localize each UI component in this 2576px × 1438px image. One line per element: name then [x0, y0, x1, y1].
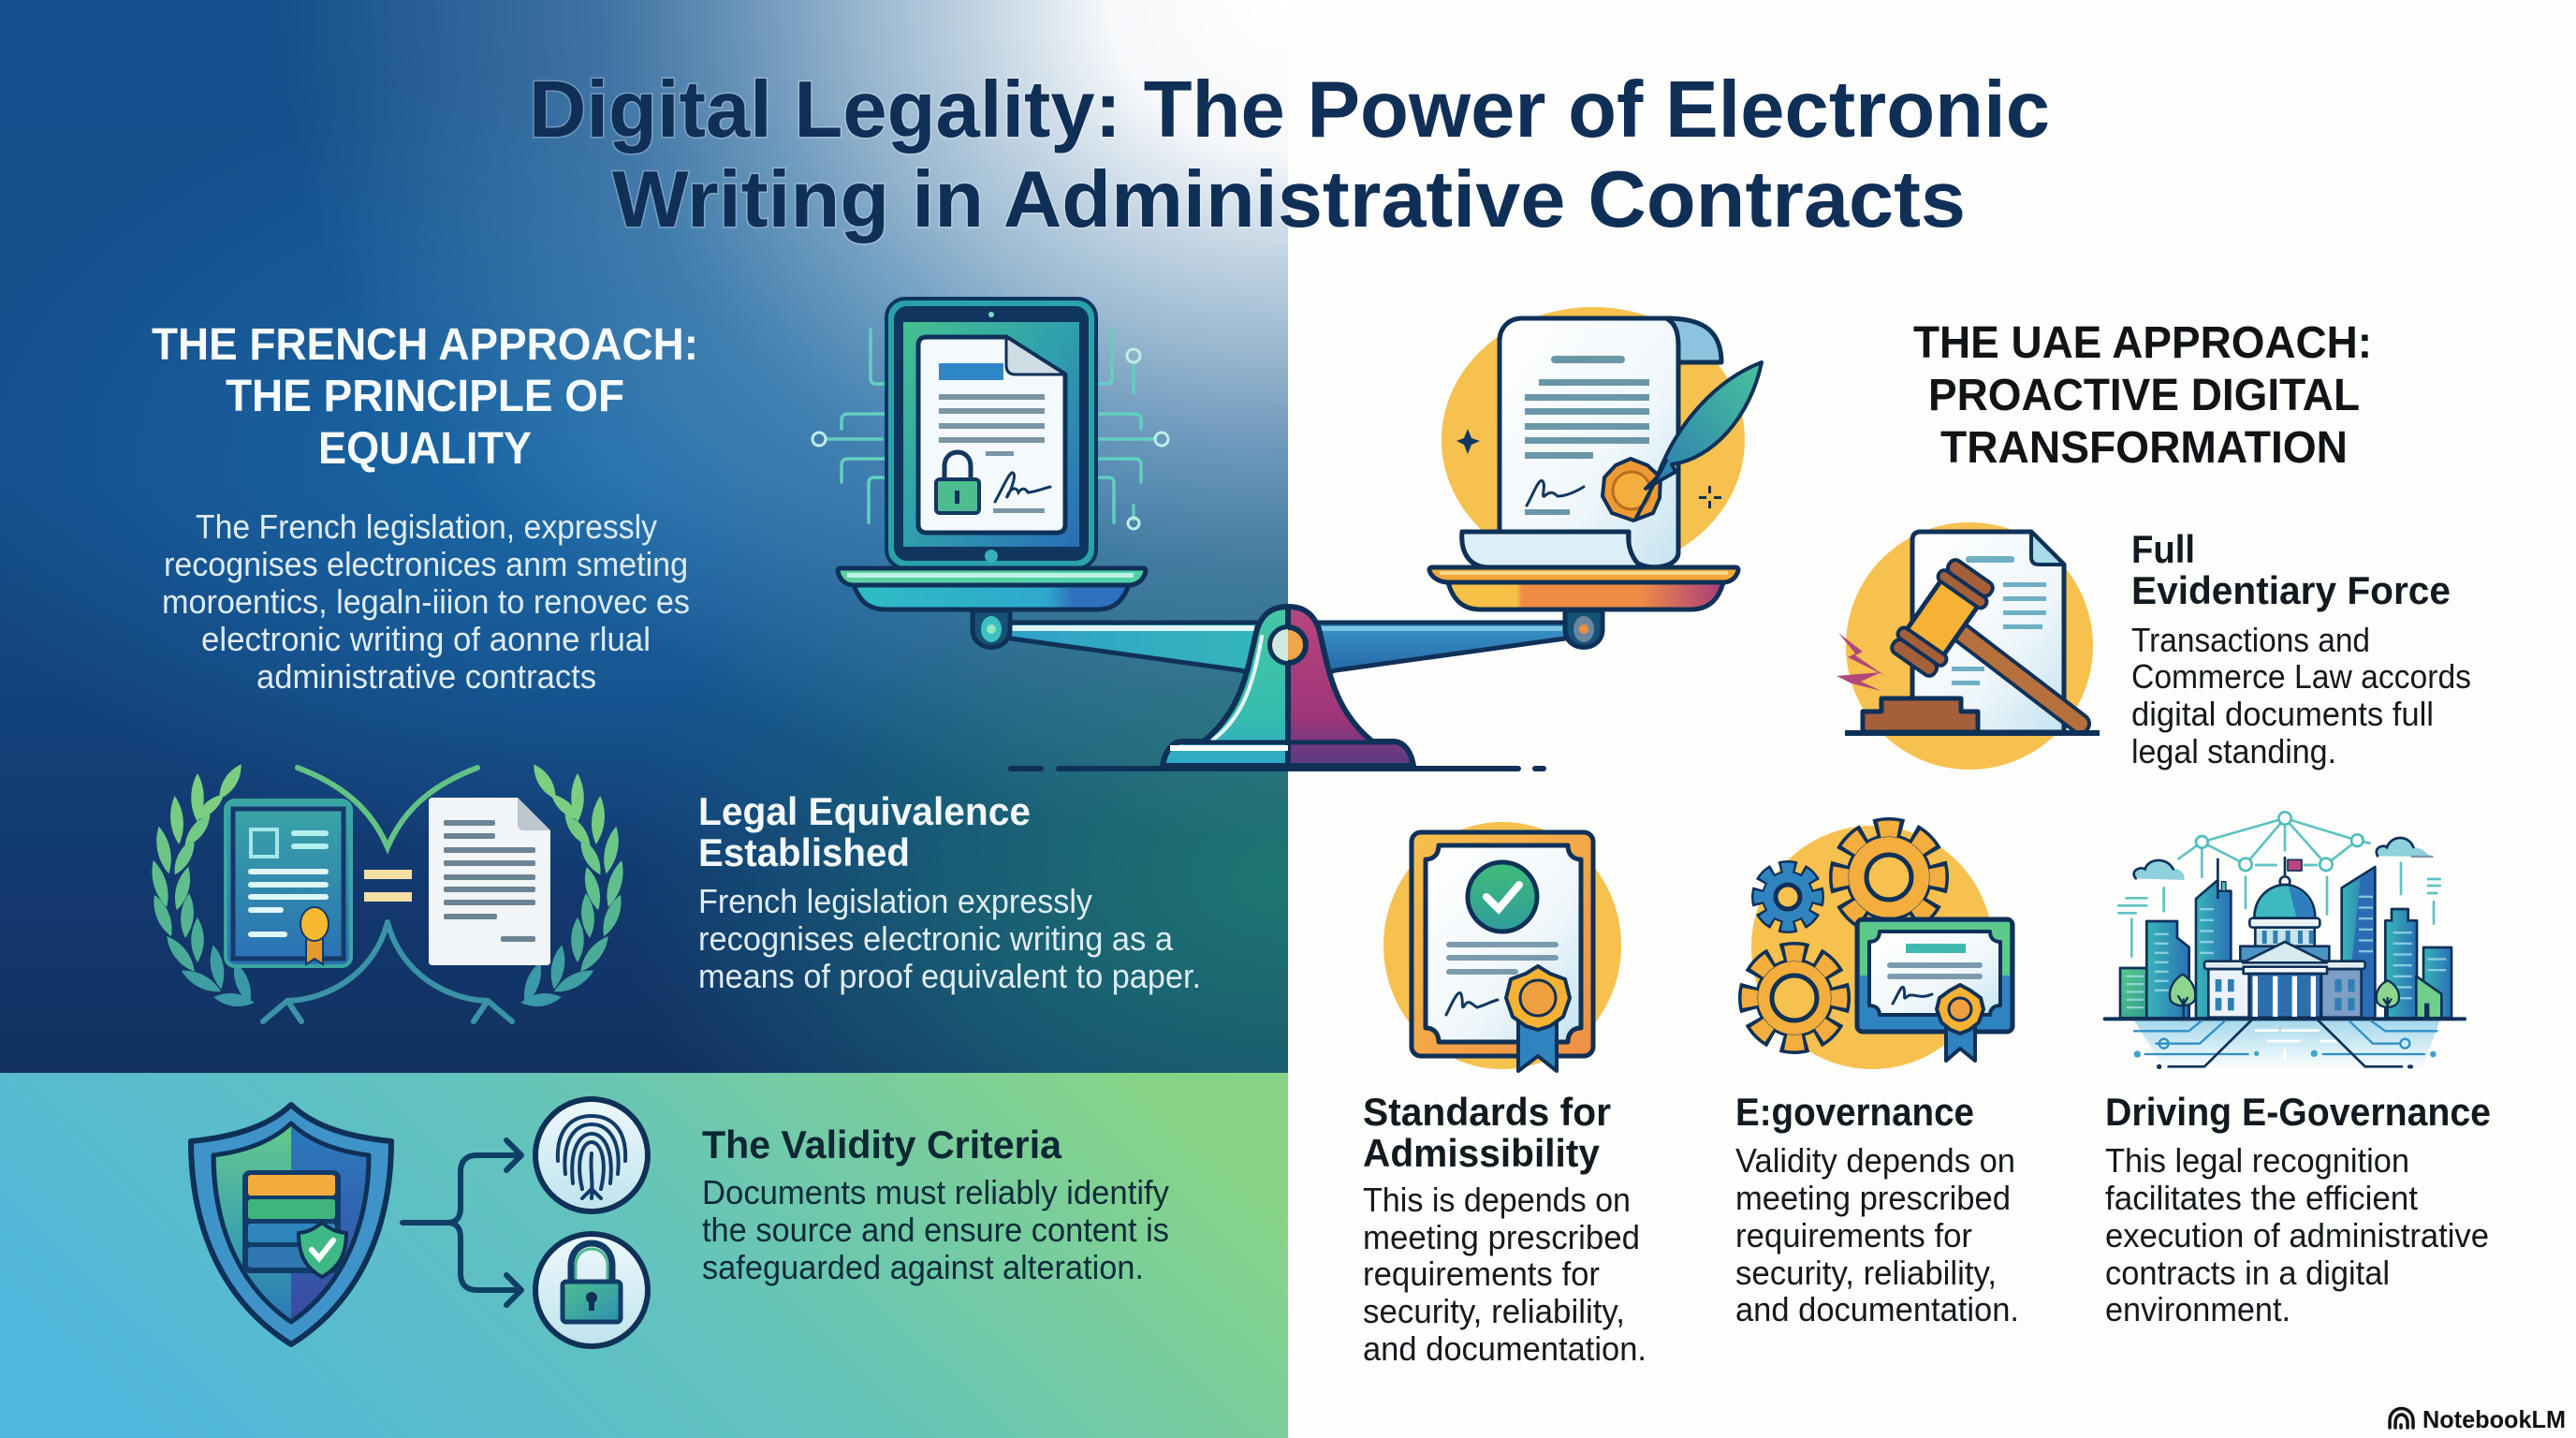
sound block	[1863, 698, 1978, 732]
left pan	[838, 568, 1146, 648]
paper document	[429, 798, 550, 965]
text block: full evidentiary force: legal standing.	[2131, 732, 2336, 770]
icon: gavel and document	[1837, 522, 2100, 770]
text block: standards for admissibility: This is depends on	[1363, 1181, 1631, 1219]
icon: legal equivalence with laurel wreath	[147, 761, 628, 1021]
clouds	[2133, 838, 2432, 880]
building windows	[2127, 896, 2446, 1008]
text block: driving e-governance: execution of administrative	[2105, 1216, 2489, 1255]
text block: legal equivalence: French legislation expressly	[698, 882, 1092, 920]
text block: full evidentiary force: Transactions and	[2131, 621, 2370, 659]
icon: smart government city	[2103, 812, 2466, 1070]
text block: full evidentiary force: digital documents full	[2131, 695, 2434, 733]
gear lower	[1749, 953, 1839, 1043]
text block: French legislation paragraph: The French legislation, expressly	[196, 507, 657, 546]
sparkles	[1456, 429, 1721, 508]
text block: French legislation paragraph: recognises electronices anm smeting	[164, 545, 688, 583]
text block: driving e-governance: Driving E-Governance	[2105, 1090, 2491, 1134]
gavel	[1887, 556, 2080, 724]
logo: NotebookLM: NotebookLM	[2422, 1405, 2566, 1433]
text block: standards for admissibility: Standards for	[1363, 1090, 1611, 1134]
heading: French approach: THE PRINCIPLE OF	[226, 372, 624, 421]
tablet document	[918, 337, 1065, 533]
title	[529, 66, 2050, 244]
network lines	[2118, 812, 2440, 957]
panel: French approach	[0, 0, 1288, 1073]
heading: French approach: EQUALITY	[318, 424, 532, 474]
icon: scroll with quill on right pan	[1429, 307, 1762, 648]
text block: legal equivalence: Legal Equivalence	[698, 789, 1031, 833]
text block: legal equivalence: means of proof equivalent to paper.	[698, 957, 1201, 995]
title: Writing in Administrative Contracts	[612, 155, 1966, 244]
heading: UAE approach: THE UAE APPROACH:	[1913, 318, 2372, 368]
tablet body	[886, 299, 1096, 568]
text block: e-governance: Validity depends on	[1735, 1141, 2015, 1180]
text block: validity criteria	[702, 1123, 1169, 1286]
buildings right	[2342, 867, 2452, 1018]
icon: padlock	[535, 1234, 648, 1346]
text block: driving e-governance	[2105, 1090, 2491, 1328]
text block: legal equivalence: Established	[698, 830, 910, 874]
text block: e-governance: requirements for	[1735, 1216, 1972, 1255]
text block: French legislation paragraph: moroentics, legaln-iiion to renovec es	[162, 582, 690, 621]
text block: legal equivalence	[698, 789, 1201, 995]
text block: legal equivalence: recognises electronic writing as a	[698, 919, 1174, 958]
heading: French approach: THE FRENCH APPROACH:	[152, 320, 698, 370]
text block: French legislation paragraph: administrative contracts	[256, 657, 596, 696]
text block: e-governance: security, reliability,	[1735, 1254, 1997, 1292]
text block: e-governance: meeting prescribed	[1735, 1179, 2011, 1217]
text block: validity criteria: the source and ensure content is	[702, 1211, 1169, 1249]
heading: UAE approach: TRANSFORMATION	[1940, 423, 2348, 473]
text block: validity criteria: Documents must reliably identify	[702, 1173, 1169, 1211]
text block: e-governance: and documentation.	[1735, 1290, 2019, 1328]
text block: French legislation paragraph	[162, 507, 690, 696]
road and circuit ground	[2103, 1017, 2466, 1070]
icon: gears and certificate	[1749, 826, 2012, 1069]
scale fulcrum	[1163, 607, 1413, 766]
icon: fingerprint	[535, 1099, 648, 1211]
text block: driving e-governance: environment.	[2105, 1290, 2291, 1328]
text block: full evidentiary force: Commerce Law accords	[2131, 657, 2471, 696]
capitol building	[2204, 857, 2365, 1018]
icon: certificate with check	[1383, 822, 1621, 1071]
scale ground line	[1008, 766, 1546, 771]
text block: validity criteria: safeguarded against alteration.	[702, 1248, 1144, 1286]
text block: full evidentiary force: Evidentiary Force	[2131, 568, 2451, 612]
panel: validity criteria	[0, 1073, 1288, 1438]
text block: full evidentiary force	[2131, 527, 2471, 770]
text block: standards for admissibility: security, reliability,	[1363, 1292, 1625, 1330]
buildings left	[2120, 858, 2231, 1018]
text block: standards for admissibility: requirements for	[1363, 1255, 1600, 1293]
scroll	[1462, 318, 1721, 567]
trees	[2170, 975, 2399, 1018]
scale beam	[992, 623, 1584, 683]
icon: tablet on left pan	[812, 299, 1168, 648]
text block: standards for admissibility: and documentation.	[1363, 1329, 1647, 1368]
title: Digital Legality: The Power of Electronic	[529, 66, 2050, 154]
text block: validity criteria: The Validity Criteria	[702, 1123, 1062, 1167]
gear top	[1840, 829, 1938, 926]
text block: driving e-governance: contracts in a digital	[2105, 1254, 2390, 1292]
heading: UAE approach	[1913, 318, 2372, 473]
gear small blue	[1759, 868, 1817, 926]
icon: shield with server stack	[191, 1105, 391, 1344]
icon: balance scale	[992, 607, 1584, 771]
heading: UAE approach: PROACTIVE DIGITAL	[1928, 371, 2360, 420]
electronic document	[226, 800, 351, 966]
text block: French legislation paragraph: electronic writing of aonne rlual	[201, 620, 651, 658]
text block: full evidentiary force: Full	[2131, 527, 2195, 571]
small certificate	[1857, 919, 2012, 1061]
text block: e-governance: E:governance	[1735, 1090, 1974, 1134]
equals sign	[364, 870, 412, 902]
heading: French approach	[152, 320, 698, 474]
text block: standards for admissibility: meeting prescribed	[1363, 1218, 1640, 1256]
text block: standards for admissibility: Admissibility	[1363, 1131, 1601, 1175]
text block: driving e-governance: This legal recognition	[2105, 1141, 2409, 1180]
lightning marks	[1837, 633, 1885, 691]
right pan	[1429, 567, 1738, 648]
text block: driving e-governance: facilitates the efficient	[2105, 1179, 2418, 1217]
text block: e-governance	[1735, 1090, 2019, 1328]
circuit traces	[812, 330, 1168, 529]
arrows: branching connector	[402, 1140, 521, 1305]
text block: standards for admissibility	[1363, 1090, 1647, 1368]
quill and seal	[1603, 362, 1762, 521]
